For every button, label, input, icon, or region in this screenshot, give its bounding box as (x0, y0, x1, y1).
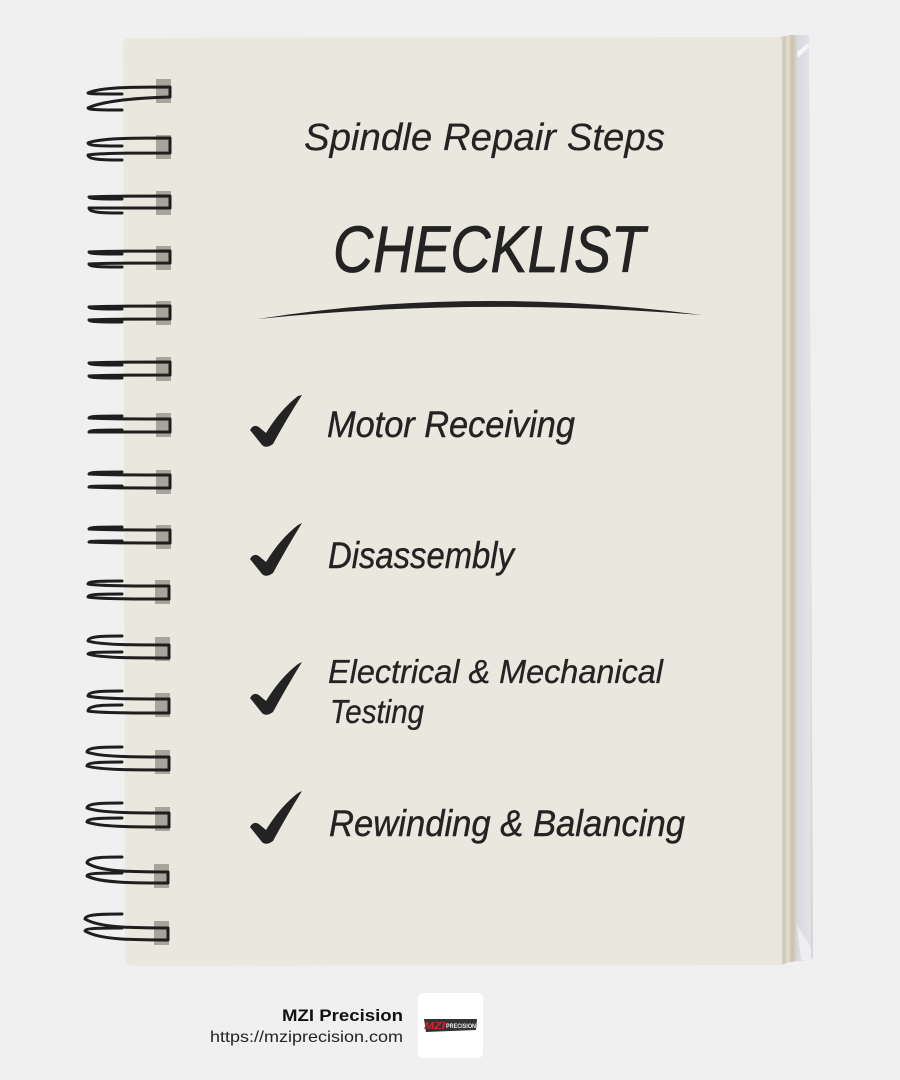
icon: check mark (250, 791, 302, 844)
footer brand text: MZI Precision (282, 1006, 403, 1025)
item: motor receiving (250, 395, 575, 447)
coil 7 (89, 413, 171, 437)
footer brand text (210, 1006, 403, 1046)
item: electrical and mechanical testing: Testing (330, 693, 425, 730)
item: electrical and mechanical testing (250, 653, 665, 730)
icon: check mark (250, 395, 302, 447)
coil 13 (87, 747, 170, 774)
logo card (418, 993, 483, 1058)
logo card: MZI (424, 1021, 445, 1032)
logo card: PRECISION (446, 1024, 476, 1030)
underline stroke (258, 301, 702, 319)
spiral binding (85, 79, 171, 945)
coil 14 (87, 803, 170, 831)
footer brand text: https://mziprecision.com (210, 1029, 403, 1046)
coil 8 (89, 470, 171, 494)
item: disassembly (250, 523, 516, 576)
subtitle: Spindle Repair Steps (304, 117, 665, 159)
coil 11 (88, 636, 170, 661)
coil 10 (88, 580, 170, 604)
coil 5 (89, 301, 171, 325)
coil 15 (87, 857, 169, 888)
coil 2 (88, 135, 171, 160)
item: motor receiving: Motor Receiving (327, 404, 575, 445)
page edges (780, 35, 796, 965)
coil 4 (89, 246, 171, 270)
item: rewinding and balancing (250, 791, 685, 844)
coil 3 (89, 191, 171, 215)
coil 9 (89, 525, 171, 549)
item: disassembly: Disassembly (328, 535, 516, 576)
icon: check mark (250, 662, 302, 715)
item: rewinding and balancing: Rewinding & Balancing (329, 803, 685, 844)
icon: check mark (250, 523, 302, 576)
notebook page (123, 37, 782, 966)
notebook back cover (790, 35, 813, 962)
coil 12 (88, 691, 170, 717)
coil 16 (85, 914, 169, 945)
coil 6 (89, 357, 171, 381)
item: electrical and mechanical testing: Electrical & Mechanical (328, 653, 665, 690)
coil 1 (88, 79, 171, 110)
heading: checklist: CHECKLIST (333, 212, 649, 286)
